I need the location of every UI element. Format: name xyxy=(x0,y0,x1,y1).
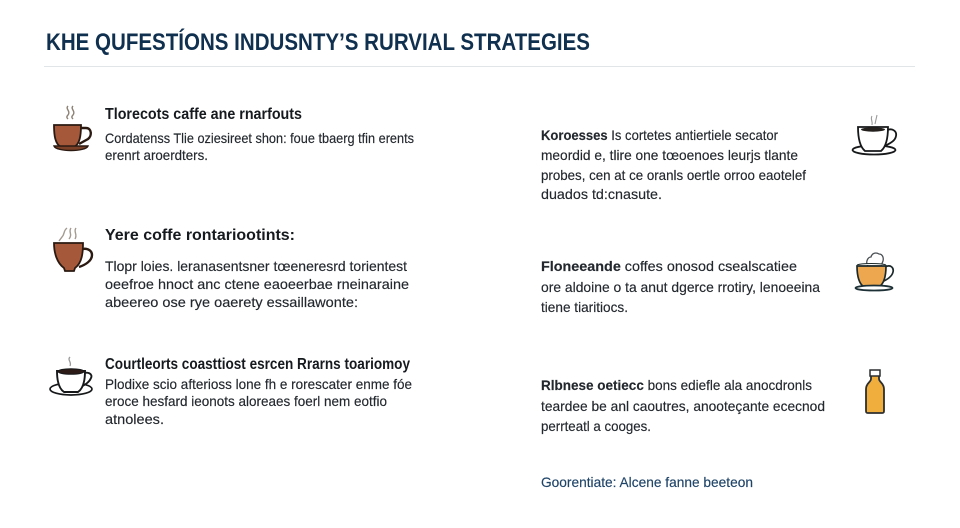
text block: right item 1: Koroesses Is cortetes antiertiele secator xyxy=(541,127,778,143)
text block: right item 3: perrteatl a cooges. xyxy=(541,418,651,434)
text block: left item 1: erenrt aroerdters. xyxy=(105,147,208,163)
text block: right item 1: meordid e, tlire one tœoenoes leurjs tlante xyxy=(541,147,798,163)
text block: right item 3 xyxy=(541,377,825,434)
text block: right item 1: probes, cen at ce oranls oertle orroo eaotelef xyxy=(541,167,806,183)
text block: left item 2: oeefroe hnoct anc ctene eaoeerbae rneinaraine xyxy=(105,276,409,292)
text block: left item 3 xyxy=(105,356,412,427)
title: KHE QUFESTÍONS INDUSNTY’S RURVIAL STRATEGIES xyxy=(46,28,590,56)
text block: left item 1: Tlorecots caffe ane rnarfouts xyxy=(105,106,302,123)
icon: brown coffee cup on saucer xyxy=(54,106,91,150)
icon: orange tea cup with steam cloud xyxy=(856,253,893,290)
text block: left item 3: atnolees. xyxy=(105,411,164,427)
text block: right item 2: Floneeande coffes onosod csealscatiee xyxy=(541,258,797,274)
icon: brown coffee mug xyxy=(54,228,92,271)
text block: right item 2: tiene tiaritiocs. xyxy=(541,299,628,315)
text block: left item 2: Yere coffe rontariootints: xyxy=(105,227,295,244)
text block: left item 1: Cordatenss Tlie oziesireet shon: foue tbaerg tfin erents xyxy=(105,130,414,146)
icon: white coffee cup with dark coffee xyxy=(852,115,896,154)
text block: left item 3: Courtleorts coasttiost esrcen Rrarns toariomoy xyxy=(105,356,410,373)
text block: left item 1 xyxy=(105,106,414,163)
icon: white coffee cup on saucer xyxy=(50,357,92,395)
text block: left item 2: abeereo ose rye oaerety essaillawonte: xyxy=(105,294,358,310)
text block: right item 3: Rlbnese oetiecc bons ediefle ala anocdronls xyxy=(541,377,812,393)
text block: left item 3: eroce hesfard ieonots aloreaes foerl nem eotfio xyxy=(105,393,387,409)
text block: right item 1: duados td:cnasute. xyxy=(541,186,662,202)
text block: left item 2: Tlopr loies. leranasentsner tœeneresrd torientest xyxy=(105,258,407,274)
text block: right item 2: ore aldoine o ta anut dgerce rrotiry, lenoeeina xyxy=(541,279,820,295)
text block: left item 3: Plodixe scio afterioss lone fh e rorescater enme fóe xyxy=(105,376,412,392)
text block: right item 3: teardee be anl caoutres, anooteçante ececnod xyxy=(541,398,825,414)
text block: right item 2 xyxy=(541,258,820,315)
icon: amber bottle xyxy=(866,370,884,413)
text block: right item 1 xyxy=(541,127,806,202)
footer note: Goorentiate: Alcene fanne beeteon xyxy=(541,474,753,490)
text block: left item 2 xyxy=(105,227,409,310)
